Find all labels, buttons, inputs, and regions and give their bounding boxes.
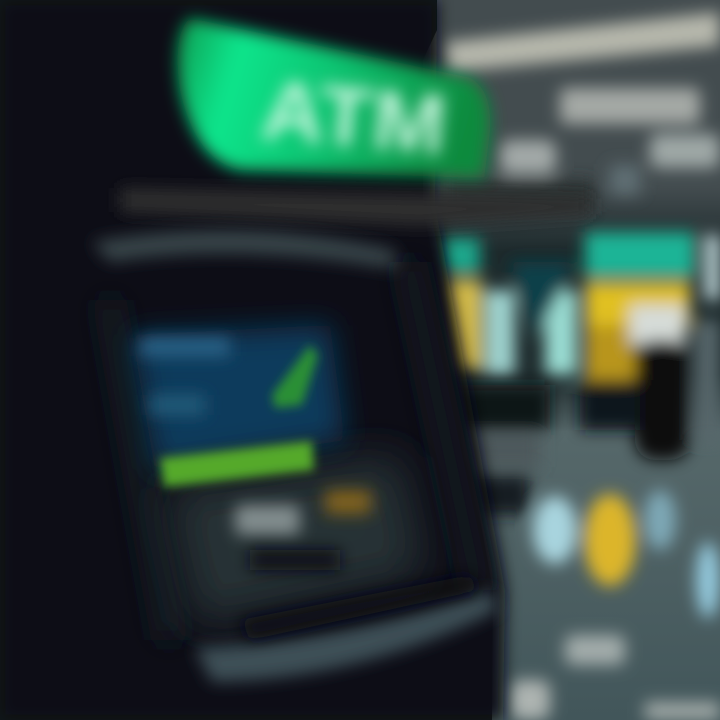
background: station interior — [423, 0, 720, 720]
upper ledge — [120, 188, 590, 226]
keypad button — [235, 505, 300, 535]
sign panel — [178, 18, 490, 178]
card slot — [250, 550, 340, 570]
body silhouette — [0, 0, 505, 720]
lower shelf — [195, 590, 498, 682]
screen green bar — [160, 441, 314, 487]
amber button — [325, 490, 371, 514]
ceiling lights — [445, 12, 720, 210]
sign lettering: ATM — [258, 62, 450, 172]
hood side — [100, 300, 180, 640]
floor reflections — [440, 385, 720, 720]
background shops — [440, 232, 720, 460]
screen check mark — [272, 345, 318, 408]
keypad panel — [165, 455, 425, 625]
green ATM sign — [178, 18, 490, 178]
screen text — [140, 338, 230, 356]
screen — [132, 325, 345, 470]
shelf shadow — [240, 575, 480, 640]
screen hood — [92, 230, 400, 270]
